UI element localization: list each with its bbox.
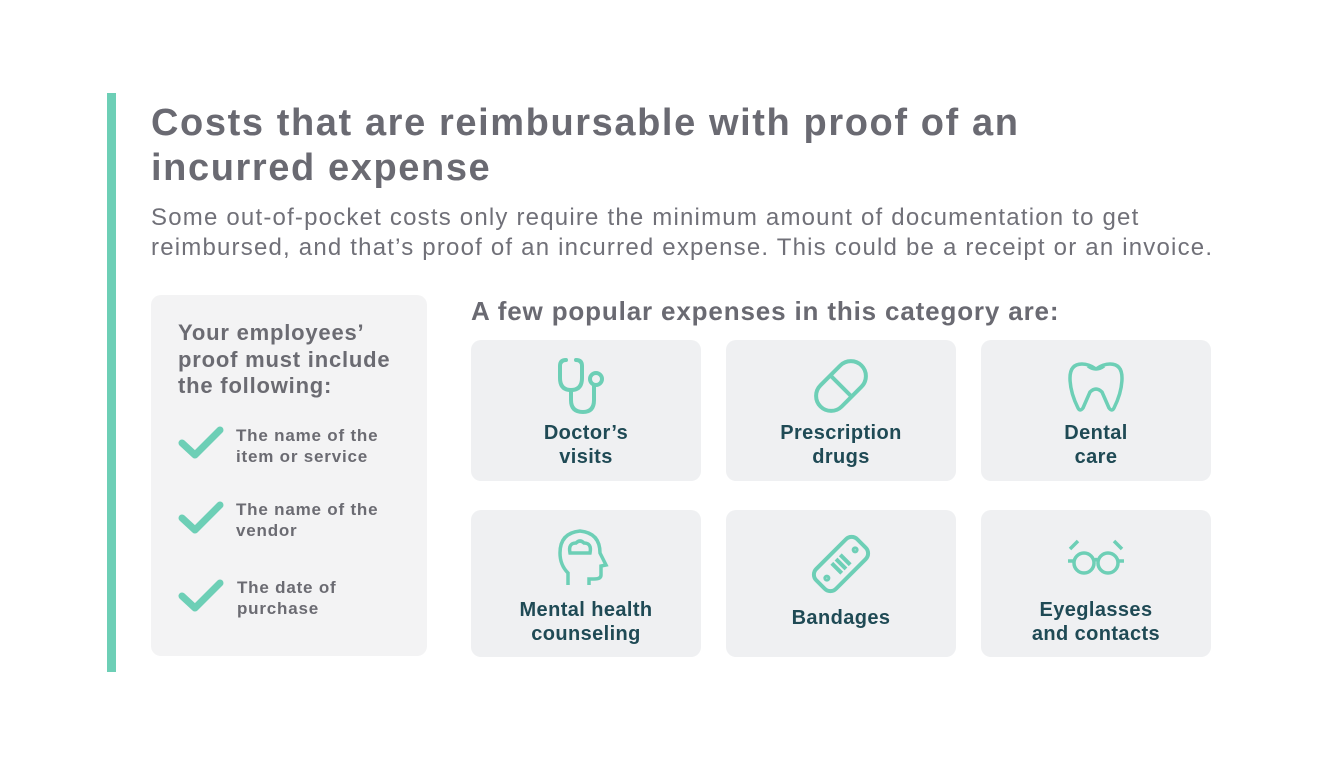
- subtitle: Some out-of-pocket costs only require the minimum amount of documentation to get: [151, 204, 1139, 231]
- icon: head with brain: [558, 529, 608, 585]
- panel heading: the following:: [178, 373, 332, 398]
- panel heading: proof must include: [178, 346, 390, 372]
- icon: tooth: [1068, 362, 1124, 412]
- title: incurred expense: [151, 147, 491, 189]
- icon: bandage: [812, 534, 870, 594]
- card: dental care: Dental: [1064, 422, 1128, 444]
- check item 1: item or service: [236, 447, 368, 466]
- card: prescription drugs: Prescription: [780, 422, 902, 444]
- check item 1: The name of the: [236, 426, 378, 445]
- check item 3: [178, 578, 336, 618]
- panel heading: Your employees’: [178, 320, 364, 345]
- icon: stethoscope: [558, 358, 604, 414]
- section heading: A few popular expenses in this category are:: [471, 296, 1059, 326]
- subtitle: [151, 204, 1213, 261]
- card: dental care: care: [1075, 446, 1117, 468]
- check item 3: purchase: [237, 599, 319, 618]
- check item 1: [178, 426, 378, 466]
- card: doctor's visits: Doctor’s: [544, 422, 628, 444]
- accent bar: [107, 93, 116, 672]
- panel: proof requirements: [151, 295, 427, 656]
- card: mental health counseling: [471, 510, 701, 657]
- card: prescription drugs: drugs: [812, 446, 870, 468]
- card: prescription drugs: [726, 340, 956, 481]
- card: bandages: [726, 510, 956, 657]
- card: doctor's visits: [471, 340, 701, 481]
- card: mental health counseling: counseling: [531, 623, 641, 645]
- check item 2: vendor: [236, 521, 297, 540]
- card: mental health counseling: Mental health: [520, 599, 652, 621]
- card: dental care: [981, 340, 1211, 481]
- icon: pill: [814, 359, 868, 413]
- subtitle: reimbursed, and that’s proof of an incurred expense. This could be a receipt or an invoice.: [151, 234, 1213, 261]
- title: Costs that are reimbursable with proof of an: [151, 102, 1020, 144]
- check item 2: [178, 500, 378, 540]
- card: bandages: Bandages: [792, 607, 890, 629]
- check item 3: The date of: [237, 578, 336, 597]
- card: eyeglasses and contacts: [981, 510, 1211, 657]
- card: doctor's visits: visits: [559, 446, 613, 468]
- title: [151, 102, 1020, 189]
- card: eyeglasses and contacts: and contacts: [1032, 623, 1160, 645]
- panel heading: [178, 320, 390, 398]
- check item 2: The name of the: [236, 500, 378, 519]
- card: eyeglasses and contacts: Eyeglasses: [1040, 599, 1152, 621]
- icon: eyeglasses: [1068, 540, 1124, 575]
